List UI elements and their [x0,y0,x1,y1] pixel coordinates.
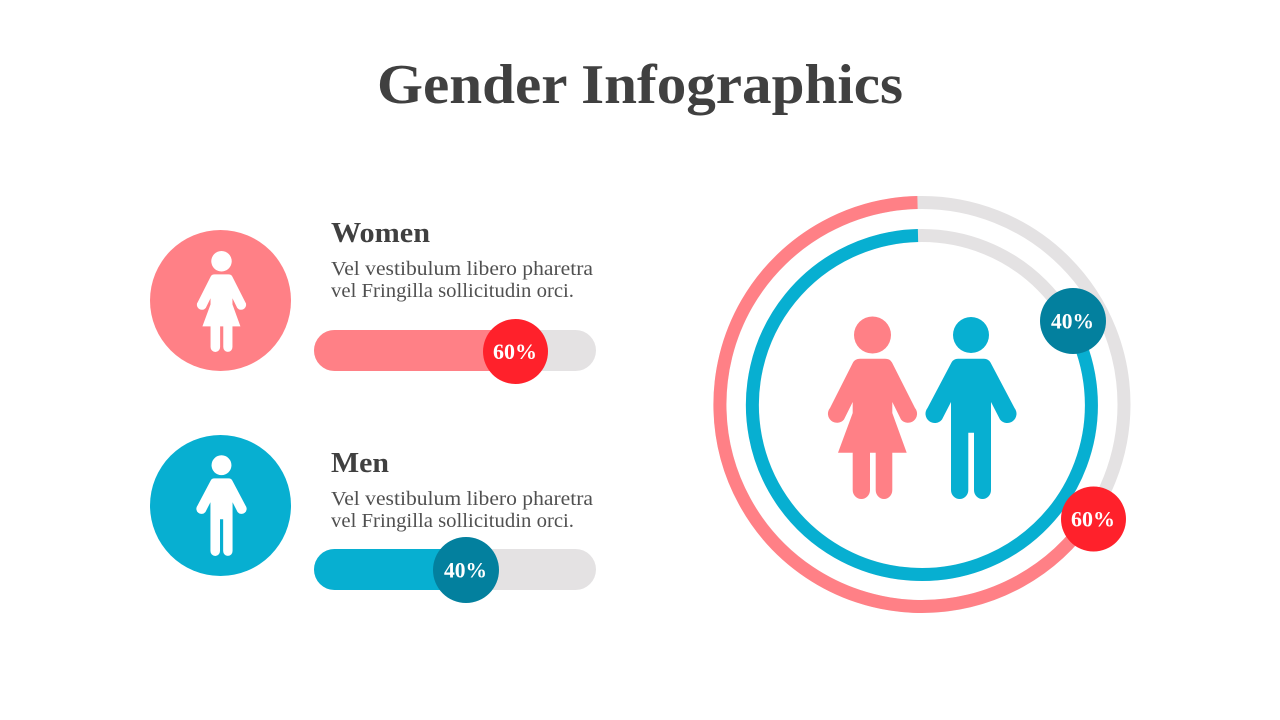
chart: concentric ring chart [720,202,1126,607]
heading: women: Women [331,218,430,249]
text block: men description: Vel vestibulum libero pharetra [331,488,593,510]
text block: women description: vel Fringilla sollicitudin orci. [331,280,574,302]
heading: men: Men [331,448,389,479]
badge: women 60%: 60% [1071,506,1115,532]
icon: woman in circle [150,230,291,371]
badge: women 60% [1061,486,1126,552]
progress bar: women 60%: 60% [493,339,537,364]
icon: woman figure [828,316,917,499]
text block: men description [331,488,593,532]
progress bar: men 40%: 40% [444,558,487,582]
badge: men 40%: 40% [1051,308,1094,334]
progress bar: women 60% [314,319,596,384]
title: Gender Infographics [377,54,903,116]
text block: women description [331,258,593,302]
text block: women description: Vel vestibulum libero pharetra [331,258,593,280]
text block: men description: vel Fringilla sollicitudin orci. [331,510,574,532]
progress bar: men 40% [314,537,596,603]
panel: women [150,218,596,384]
inner ring: men 40% [752,236,1092,575]
icon: man figure [925,317,1017,499]
panel: men [150,435,596,603]
icon: man in circle [150,435,291,576]
outer ring: women 60% [720,202,1124,607]
badge: men 40% [1040,288,1106,354]
